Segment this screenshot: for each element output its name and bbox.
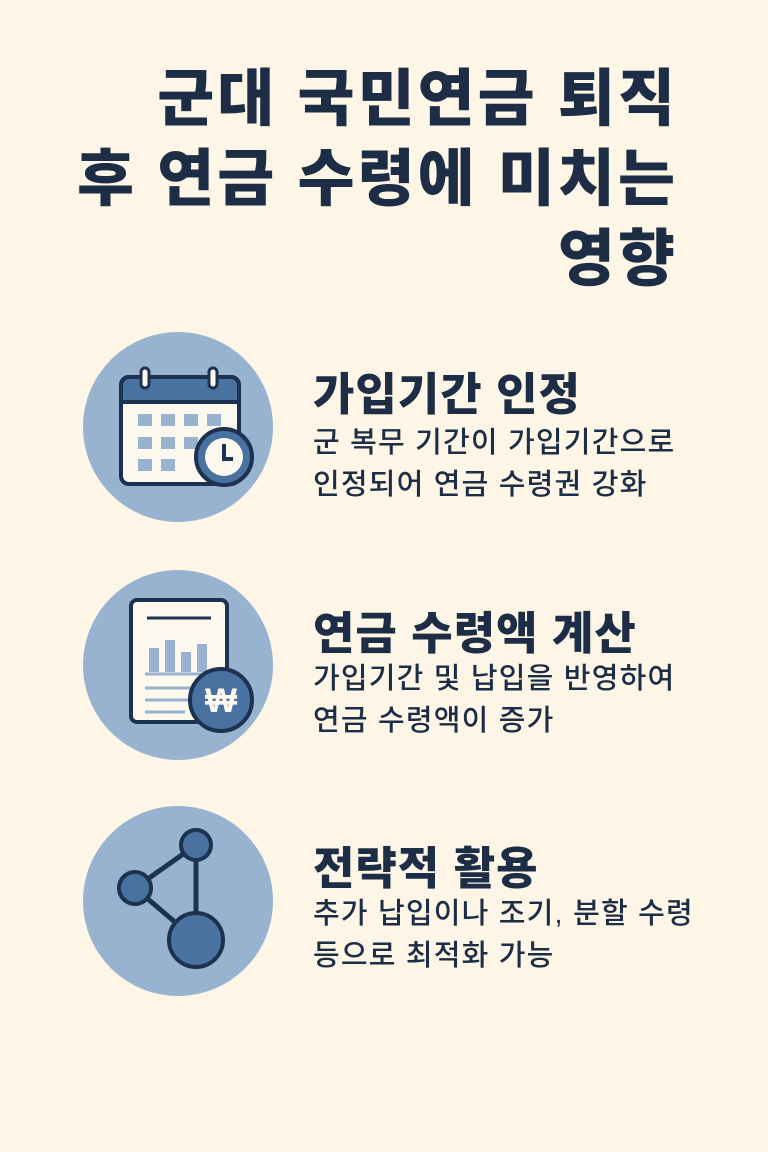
text: 전략적 활용: 등으로 최적화 가능 [313, 940, 555, 972]
text: 연금 수령액 계산 [313, 663, 675, 737]
text: 가입기간 인정: 군 복무 기간이 가입기간으로 [313, 427, 675, 459]
text: 연금 수령액 계산: 가입기간 및 납입을 반영하여 [313, 663, 675, 695]
icon: network nodes [83, 806, 273, 996]
text: 연금 수령액 계산: 연금 수령액이 증가 [313, 705, 555, 737]
title: 후 연금 수령에 미치는 [77, 145, 678, 214]
icon: document with won coin: ₩ [205, 682, 238, 720]
heading: 연금 수령액 계산: 연금 수령액 계산 [313, 608, 637, 659]
icon: document with won coin [83, 570, 273, 760]
text: 전략적 활용: 추가 납입이나 조기, 분할 수령 [313, 898, 694, 930]
title: 군대 국민연금 퇴직 [157, 65, 678, 134]
text: 가입기간 인정 [313, 427, 675, 501]
icon: calendar [83, 332, 273, 522]
title: 영향 [558, 225, 678, 294]
text: 가입기간 인정: 인정되어 연금 수령권 강화 [313, 469, 647, 501]
heading: 가입기간 인정: 가입기간 인정 [313, 369, 581, 420]
title [77, 65, 678, 294]
text: 전략적 활용 [313, 898, 694, 972]
heading: 전략적 활용: 전략적 활용 [313, 843, 539, 894]
